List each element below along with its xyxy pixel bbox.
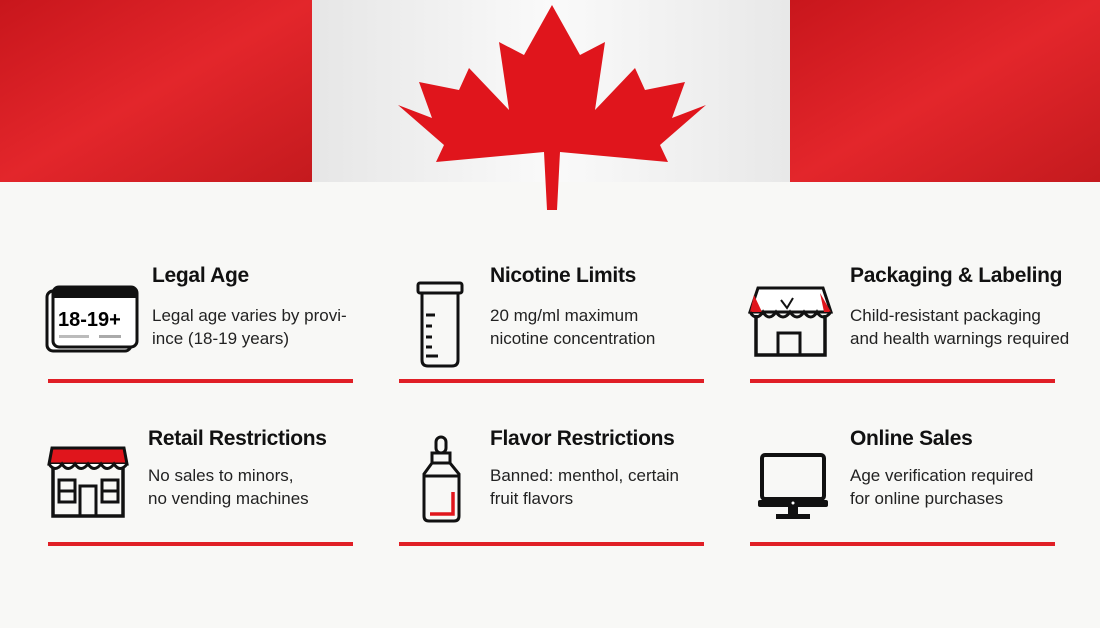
text [490,466,679,508]
icon: monitor [758,453,828,519]
card: flavor restrictions [422,427,679,522]
card: legal age [46,264,347,352]
text [850,306,1069,348]
icon: bottle [416,282,464,368]
text: no vending machines [148,489,309,508]
card: packaging [748,264,1069,357]
text: Legal age varies by provi- [152,306,347,325]
icon: storefront [748,286,833,357]
title: Retail Restrictions [148,427,327,450]
icon: dropper bottle [422,436,460,522]
text: No sales to minors, [148,466,294,485]
text [850,466,1033,508]
text: ince (18-19 years) [152,329,289,348]
title: Nicotine Limits [490,264,636,287]
text: Banned: menthol, certain [490,466,679,485]
icon: ID card [46,286,138,352]
text [490,306,655,348]
text: and health warnings required [850,329,1069,348]
flag banner [0,0,1100,210]
card: nicotine limits [416,264,655,368]
maple leaf [398,5,706,210]
text [148,466,309,508]
title: Packaging & Labeling [850,264,1062,287]
card: online sales [758,427,1033,519]
text [152,306,347,348]
text: nicotine concentration [490,329,655,348]
title: Legal Age [152,264,249,287]
title: Flavor Restrictions [490,427,675,450]
text: 20 mg/ml maximum [490,306,638,325]
title: Online Sales [850,427,972,450]
text: Age verification required [850,466,1033,485]
text: Child-resistant packaging [850,306,1041,325]
text: for online purchases [850,489,1003,508]
card: retail restrictions [47,427,327,518]
text: fruit flavors [490,489,573,508]
icon: ID card: 18-19+ [58,309,121,331]
icon: shop [47,446,129,518]
